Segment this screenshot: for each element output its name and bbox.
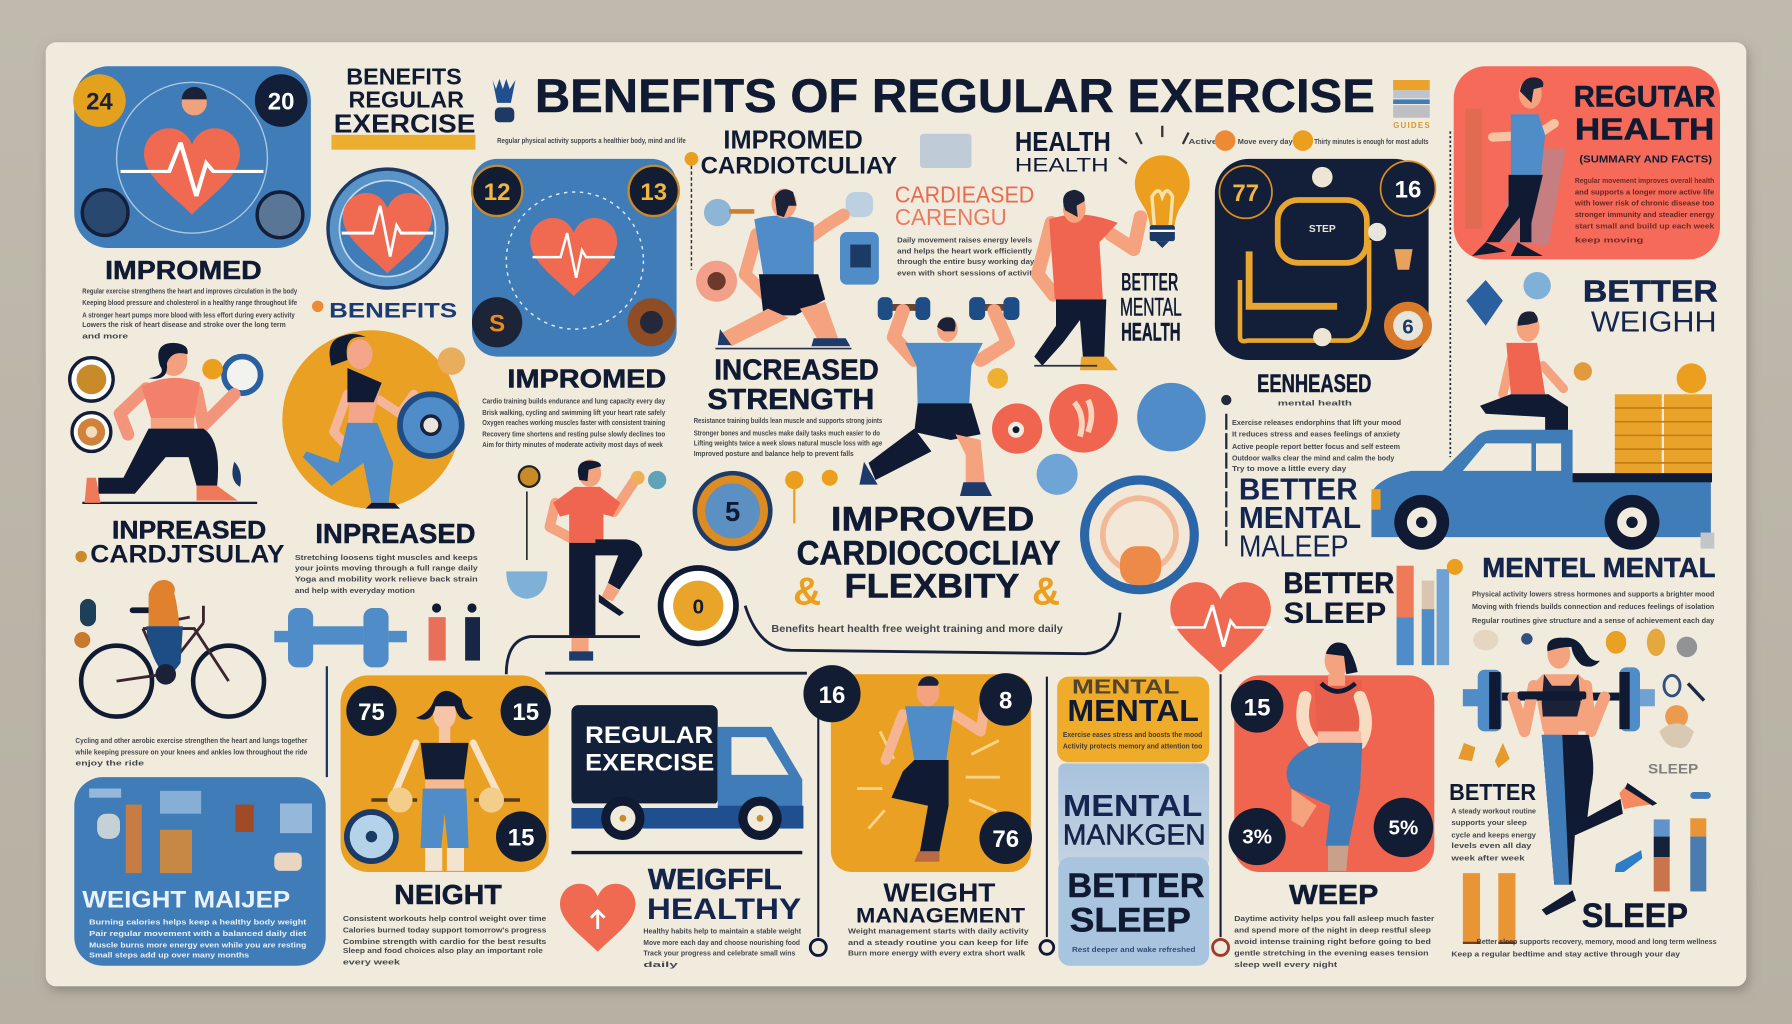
panel: weight blue card: Muscle burns more energy even while you are resting xyxy=(89,940,307,949)
text block: neight: Combine strength with cardio for the best results xyxy=(343,937,546,946)
heading: better mental maleep: BETTER xyxy=(1239,471,1358,506)
heading: better mental maleep: MALEEP xyxy=(1239,529,1349,564)
icon: title right stripes xyxy=(1393,80,1430,130)
text block: improved 1 xyxy=(82,287,298,340)
panel: mental and sleep column: Rest deeper and wake refreshed xyxy=(1072,945,1196,954)
text block: strength: Improved posture and balance help to prevent falls xyxy=(694,449,854,458)
figure: balancing man xyxy=(506,459,666,661)
text block: weigffl: daily xyxy=(643,960,679,969)
heading: improved 2: IMPROMED xyxy=(507,363,666,393)
icon: stack of gold plates xyxy=(1615,394,1712,474)
heading: increased cardio left xyxy=(75,516,285,568)
panel: orange woman card: 15 xyxy=(512,699,539,726)
panel: mental and sleep column xyxy=(1057,676,1209,966)
figure: cyclist xyxy=(74,580,264,717)
text block: cycling: Cycling and other aerobic exercise strengthen the heart and lungs together xyxy=(75,736,308,745)
panel: coral woman card: 5% xyxy=(1389,816,1418,839)
panel: weight blue card xyxy=(74,777,326,966)
text block: weep: avoid intense training right before going to bed xyxy=(1234,937,1431,946)
heading: increased cardio left: CARDJTSULAY xyxy=(90,540,285,568)
icon: blue stretch band xyxy=(1615,850,1642,872)
panel: heart card top-left: 20 xyxy=(268,89,294,116)
text block: better right: A steady workout routine xyxy=(1451,807,1536,816)
text block: weight management xyxy=(848,927,1030,957)
heading: improved cardio: IMPROMED xyxy=(723,125,863,155)
text block: improved 1: A stronger heart pumps more blood with less effort during every activity xyxy=(82,311,296,320)
figure: lunging woman with weights xyxy=(70,343,261,503)
icons: sleep area small: SLEEP xyxy=(1648,762,1698,777)
text block: better right: week after week xyxy=(1450,854,1526,863)
panel: heart card blue centre: S xyxy=(489,310,505,337)
heading: coral cardio text: CARDIEASED xyxy=(895,181,1034,207)
panel: weight blue card: WEIGHT MAIJEP xyxy=(82,886,290,913)
heading: health health: HEALTH xyxy=(1015,126,1111,157)
panel: orange woman card xyxy=(341,675,551,872)
heading: better weigh xyxy=(1583,274,1718,338)
text block: better right: levels even all day xyxy=(1451,841,1533,850)
text block: cardio coral: and helps the heart work efficiently xyxy=(897,247,1033,256)
panel: coral regular health: REGUTAR xyxy=(1574,80,1715,113)
panel: coral regular health xyxy=(1454,66,1720,259)
text block: cardio coral: through the entire busy working day xyxy=(897,257,1035,266)
connector: timeline two xyxy=(1040,677,1054,954)
heading: improved cardio: CARDIOTCULIAY xyxy=(701,153,897,180)
chart: orange columns xyxy=(1463,873,1515,943)
text block: sleep right: Keep a regular bedtime and stay active through your day xyxy=(1451,950,1681,959)
icon: bottles xyxy=(429,603,480,661)
heading: better right: BETTER xyxy=(1449,779,1536,805)
panel: coral regular health: HEALTH xyxy=(1575,111,1714,146)
panel: mental and sleep column: MENTAL xyxy=(1072,676,1179,699)
text block: inpreased: and help with everyday motion xyxy=(295,586,415,595)
text block: mental: Regular routines give structure and a sense of achievement each day xyxy=(1472,616,1715,625)
heading: benefits regular exercise block: EXERCISE xyxy=(334,109,475,139)
text block: sleep right: Better sleep supports recovery, memory, mood and long term wellness xyxy=(1477,937,1717,946)
text block: strength: Lifting weights twice a week slows natural muscle loss with age xyxy=(694,439,882,448)
connector: timeline three xyxy=(1213,674,1229,955)
text block: sleep right xyxy=(1451,937,1717,959)
chart: sleep bars xyxy=(1397,559,1463,665)
text block: improved 2: Cardio training builds endurance and lung capacity every day xyxy=(482,396,666,405)
text block: improved 2: Oxygen reaches working muscles faster with consistent training xyxy=(482,418,666,427)
callout: improved cardio flexibility: & xyxy=(1032,571,1060,614)
heading: sleep right: SLEEP xyxy=(1582,897,1688,935)
subtitle rule under title: Regular physical activity supports a healthier body, mind and life xyxy=(497,136,686,145)
heading: weigffl healthy xyxy=(647,864,801,926)
figure: runner on orange circle xyxy=(282,330,465,509)
text block: mental: Moving with friends builds connection and reduces feelings of isolation xyxy=(1472,602,1715,611)
text block: mental: Physical activity lowers stress hormones and supports a brighter mood xyxy=(1472,590,1715,599)
text block: enhanced: It reduces stress and eases feelings of anxiety xyxy=(1232,430,1401,439)
figure: weightlifter man xyxy=(859,297,1019,496)
text block: improved 1: Regular exercise strengthens the heart and improves circulation in the body xyxy=(82,287,298,296)
panel: coral woman card xyxy=(1229,643,1434,872)
figure: regular exercise truck: REGULAR xyxy=(585,722,713,749)
text block: cardio coral xyxy=(897,235,1038,277)
subtitle rule under title: Move every day xyxy=(1238,137,1293,146)
heading: better mental health xyxy=(1120,268,1182,347)
heading: neight: NEIGHT xyxy=(394,879,502,910)
text block: better right: supports your sleep xyxy=(1451,818,1527,827)
heading: increased cardio left: INPREASED xyxy=(112,516,266,544)
title: BENEFITS OF REGULAR EXERCISE xyxy=(535,70,1375,122)
panel: orange man card: 16 xyxy=(819,682,845,709)
heading: weight management: MANAGEMENT xyxy=(856,902,1026,927)
icon: large coral heart xyxy=(1170,582,1271,673)
icon: medal zero xyxy=(661,568,736,643)
text block: weigffl: Healthy habits help to maintain a stable weight xyxy=(643,927,802,936)
panel: coral regular health: stronger immunity and steadier energy xyxy=(1575,210,1715,219)
panel: coral regular health: keep moving xyxy=(1575,235,1644,244)
heading: increased strength xyxy=(707,354,879,416)
panel: coral woman card: 3% xyxy=(1242,825,1272,848)
panel: heart card blue centre: 12 xyxy=(484,179,510,206)
text block: better right: cycle and keeps energy xyxy=(1451,831,1537,840)
heading: weight management: WEIGHT xyxy=(883,878,995,908)
panel: orange woman card: 75 xyxy=(358,699,385,726)
icon: medal zero: 0 xyxy=(693,596,704,619)
heading: better sleep middle xyxy=(1283,567,1394,630)
panel: weight blue card: Small steps add up over many months xyxy=(89,951,249,960)
panel: mental and sleep column: MANKGEN xyxy=(1063,820,1206,852)
icons: sleep area small xyxy=(1458,629,1707,795)
text block: weight management: Burn more energy with every extra short walk xyxy=(848,948,1026,957)
panel: mental and sleep column: Exercise eases stress and boosts the mood xyxy=(1063,730,1203,739)
heading: increased strength: STRENGTH xyxy=(707,384,874,416)
callout: improved cardio flexibility: CARDIOCOCLIAY xyxy=(797,535,1061,573)
panel: heart card blue centre xyxy=(472,159,679,357)
panel: coral regular health: and supports a longer more active life xyxy=(1575,187,1714,196)
panel: dark track diagram: STEP xyxy=(1309,224,1336,235)
icons: decorative coral and blue discs xyxy=(987,368,1206,495)
panel: heart card top-left: 24 xyxy=(86,89,113,116)
panel: heart card blue centre: 13 xyxy=(640,179,667,206)
callout: improved cardio flexibility xyxy=(745,500,1120,654)
text block: cardio coral: Daily movement raises energy levels xyxy=(897,235,1032,244)
text block: inpreased: Yoga and mobility work relieve back strain xyxy=(295,575,478,584)
heading: benefits regular exercise block: REGULAR xyxy=(349,86,465,112)
heading: mentel mental: MENTEL MENTAL xyxy=(1482,552,1715,583)
panel: coral woman card: 15 xyxy=(1244,694,1270,721)
heading: coral cardio text xyxy=(895,181,1034,230)
panel: mental and sleep column: SLEEP xyxy=(1070,901,1191,939)
connector lines xyxy=(1222,131,1450,549)
text block: cardio coral: even with short sessions of activity xyxy=(897,268,1038,277)
figure: regular exercise truck xyxy=(571,705,803,853)
icon: title left emblem xyxy=(493,79,515,122)
subtitle rule under title: Active xyxy=(1189,137,1217,146)
text block: weight management: and a steady routine you can keep for life xyxy=(848,938,1029,947)
heading: coral cardio text: CARENGU xyxy=(895,204,1007,230)
icon: coral heart small xyxy=(560,884,635,952)
text block: improved 2: Brisk walking, cycling and swimming lift your heart rate safely xyxy=(482,408,666,417)
chart: stacked columns xyxy=(1654,818,1706,891)
text block: improved 2 xyxy=(482,396,666,449)
text block: neight: every week xyxy=(343,958,401,967)
panel: mental and sleep column: MENTAL xyxy=(1063,788,1202,823)
heading: increased strength: INCREASED xyxy=(714,354,879,386)
heading: health health: HEALTH xyxy=(1015,154,1109,176)
figure: woman with barbell xyxy=(1463,638,1657,915)
icon: blue dumbbell xyxy=(274,608,407,667)
callout: improved cardio flexibility: FLEXBITY xyxy=(845,568,1020,606)
text block: strength xyxy=(694,416,882,458)
callout: improved cardio flexibility: & xyxy=(793,571,821,614)
text block: cycling: while keeping pressure on your knees and ankles low throughout the ride xyxy=(75,747,307,756)
panel: mental and sleep column: BETTER xyxy=(1067,867,1205,905)
text block: enhanced: Outdoor walks clear the mind and calm the body xyxy=(1232,454,1395,463)
heading: weight management xyxy=(856,878,1026,927)
text block: strength: Stronger bones and muscles make daily tasks much easier to do xyxy=(694,428,880,437)
panel: mental and sleep column: Activity protects memory and attention too xyxy=(1063,742,1203,751)
heading: better sleep middle: BETTER xyxy=(1283,567,1394,600)
text block: strength: Resistance training builds lean muscle and supports strong joints xyxy=(694,416,882,425)
panel: coral regular health: with lower risk of chronic disease too xyxy=(1574,199,1715,208)
panel: orange man card xyxy=(803,665,1032,872)
panel: weight blue card: Burning calories helps keep a healthy body weight xyxy=(89,918,307,927)
heading: better mental health: MENTAL xyxy=(1120,293,1182,321)
icons: weight management small xyxy=(1466,272,1706,393)
text block: improved 2: Aim for thirty minutes of moderate activity most days of week xyxy=(482,440,664,449)
panel: coral regular health: start small and build up each week xyxy=(1575,222,1715,231)
heading: enhanced: EENHEASED xyxy=(1257,370,1371,398)
heading: better weigh: BETTER xyxy=(1583,274,1718,309)
heading: better mental maleep: MENTAL xyxy=(1239,500,1361,535)
heading: better weigh: WEIGHH xyxy=(1591,306,1717,338)
figure: man stepping on truck xyxy=(1480,311,1568,440)
text block: enhanced: Exercise releases endorphins that lift your mood xyxy=(1232,418,1402,427)
text block: cycling: enjoy the ride xyxy=(75,759,144,768)
panel: dark track diagram: 77 xyxy=(1232,180,1259,207)
callout: improved cardio flexibility: IMPROVED xyxy=(831,500,1034,538)
text block: enhanced xyxy=(1232,399,1402,473)
heading: benefits regular exercise block xyxy=(331,64,475,150)
text block: inpreased: your joints moving through a full range daily xyxy=(295,563,479,572)
icon: title right stripes: GUIDES xyxy=(1393,121,1430,130)
figure: regular exercise truck: EXERCISE xyxy=(585,749,714,776)
heading: improved 1: IMPROMED xyxy=(105,255,262,285)
text block: weep xyxy=(1234,914,1434,969)
text block: improved 1: Keeping blood pressure and cholesterol in a healthy range throughout life xyxy=(82,298,297,307)
callout: improved cardio flexibility: Benefits heart health free weight training and more daily xyxy=(771,624,1063,635)
text block: weigffl xyxy=(643,927,802,969)
panel: orange man card: 8 xyxy=(999,688,1012,715)
heading: weigffl healthy: WEIGFFL xyxy=(648,864,782,896)
heading: health health xyxy=(920,126,1111,176)
icon: target ring xyxy=(1080,475,1199,594)
heading: inpreased 2: INPREASED xyxy=(315,518,475,549)
text block: cycling xyxy=(75,736,308,768)
text block: better right xyxy=(1450,807,1537,863)
heading: benefits regular exercise block: BENEFITS xyxy=(346,64,462,90)
text block: weep: gentle stretching in the evening eases tension xyxy=(1234,948,1429,957)
text block: neight: Consistent workouts help control weight over time xyxy=(343,914,546,923)
text block: inpreased: Stretching loosens tight muscles and keeps xyxy=(295,553,478,562)
heading: better sleep middle: SLEEP xyxy=(1283,597,1386,630)
text block: enhanced: Active people report better focus and self esteem xyxy=(1232,442,1400,451)
heading: weep: WEEP xyxy=(1289,879,1378,910)
panel: mental and sleep column: MENTAL xyxy=(1067,693,1199,728)
heading: improved cardio xyxy=(701,125,897,180)
panel: dark track diagram: 6 xyxy=(1402,316,1414,339)
panel: coral regular health: Regular movement improves overall health xyxy=(1575,176,1715,185)
icon: medal five xyxy=(693,470,838,551)
heading: benefits: BENEFITS xyxy=(329,298,457,323)
text block: weigffl: Move more each day and choose nourishing food xyxy=(643,938,800,947)
heading: weigffl healthy: HEALTHY xyxy=(647,893,801,926)
text block: weep: Daytime activity helps you fall asleep much faster xyxy=(1234,914,1434,923)
text block: neight xyxy=(343,914,546,967)
panel: orange man card: 76 xyxy=(992,826,1019,853)
text block: weep: sleep well every night xyxy=(1234,960,1338,969)
heading: better mental maleep xyxy=(1239,471,1361,564)
text block: neight: Sleep and food choices also play an important role xyxy=(343,946,543,955)
text block: improved 2: Recovery time shortens and resting pulse slowly declines too xyxy=(482,430,666,439)
text block: improved 1: Lowers the risk of heart disease and stroke over the long term xyxy=(82,320,286,329)
panel: coral regular health: (SUMMARY AND FACTS) xyxy=(1579,154,1712,165)
panel: heart card top-left xyxy=(73,66,311,248)
text block: neight: Calories burned today support tomorrow's progress xyxy=(343,926,546,935)
connector curve xyxy=(506,637,807,674)
figure: standing man coral shirt xyxy=(1034,190,1141,370)
text block: enhanced: Try to move a little every day xyxy=(1232,464,1347,473)
heading: better mental health: BETTER xyxy=(1121,268,1178,296)
panel: orange woman card: 15 xyxy=(508,825,534,852)
text block: inpreased xyxy=(295,553,479,595)
connector line left xyxy=(326,666,328,777)
text block: weight management: Weight management starts with daily activity xyxy=(848,927,1030,936)
text block: weep: and spend more of the night in deep restful sleep xyxy=(1234,926,1431,935)
panel: dark track diagram xyxy=(1215,159,1435,360)
figure: blue pickup truck xyxy=(1371,430,1714,550)
icon: lightbulb xyxy=(1119,126,1190,248)
heading: better mental health: HEALTH xyxy=(1121,319,1181,347)
panel: weight blue card: Pair regular movement with a balanced daily diet xyxy=(89,929,307,938)
icon: medal five: 5 xyxy=(725,496,740,527)
subtitle rule under title: Thirty minutes is enough for most adults xyxy=(1314,137,1429,146)
text block: weigffl: Track your progress and celebrate small wins xyxy=(643,948,795,957)
text block: enhanced: mental health xyxy=(1278,399,1353,408)
icon: heart in ring xyxy=(328,169,447,288)
subtitle rule under title xyxy=(497,130,1429,151)
panel: dark track diagram: 16 xyxy=(1395,177,1421,204)
text block: improved 1: and more xyxy=(82,331,128,340)
text block: mental xyxy=(1472,590,1715,625)
connector: timeline one xyxy=(810,714,826,955)
figure: runner man xyxy=(685,152,879,349)
